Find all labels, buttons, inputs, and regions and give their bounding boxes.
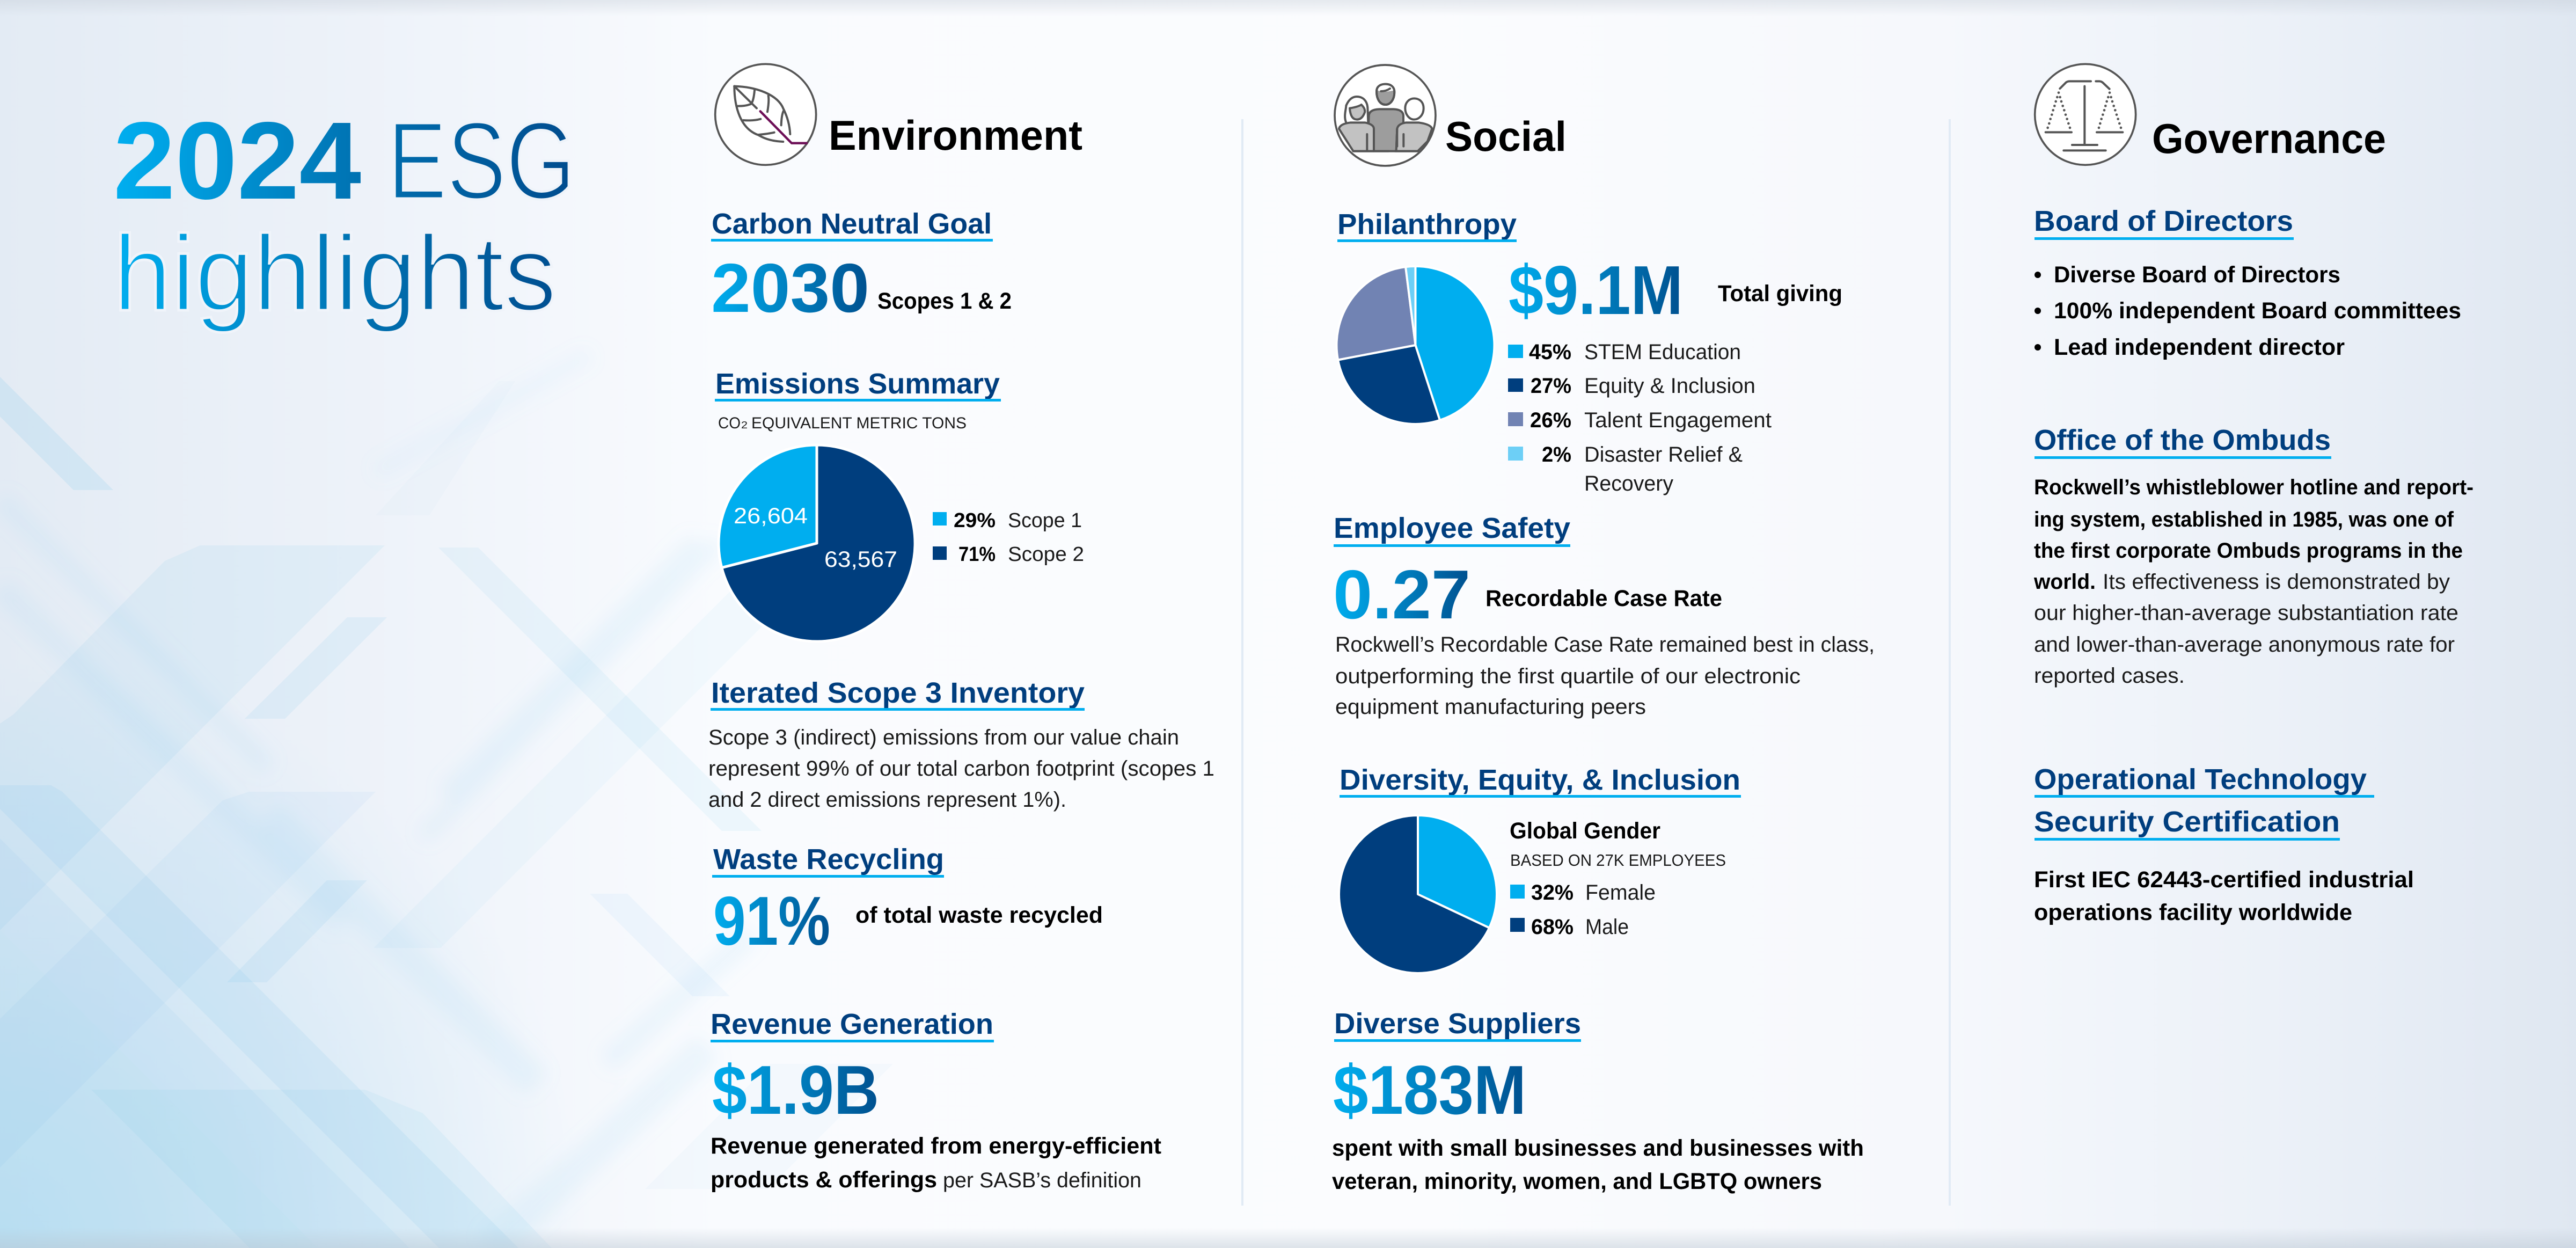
subheading: Revenue Generation: Revenue Generation bbox=[711, 1008, 993, 1040]
body text: operations facility worldwide bbox=[2034, 900, 2352, 925]
divider: social and governance bbox=[1949, 119, 1951, 1206]
block: waste recycling bbox=[712, 843, 1103, 960]
icon: scales bbox=[2035, 64, 2136, 165]
body text bbox=[708, 726, 1214, 812]
stat: 0.27: 0.27 bbox=[1333, 556, 1470, 633]
panel: environment bbox=[708, 64, 1214, 1193]
panel: social bbox=[1332, 65, 1875, 1194]
stat: $9.1M: $9.1M bbox=[1509, 252, 1683, 329]
body text: the first corporate Ombuds programs in the bbox=[2034, 539, 2463, 563]
pie chart: emissions: 63,567 bbox=[824, 546, 897, 572]
icon: leaf bbox=[715, 64, 816, 165]
legend: philanthropy: Equity & Inclusion bbox=[1584, 374, 1755, 398]
body text: per SASB’s definition bbox=[943, 1169, 1141, 1192]
body text bbox=[1335, 633, 1875, 719]
subheading: Philanthropy: Philanthropy bbox=[1337, 208, 1517, 240]
chart note: EQUIVALENT METRIC TONS bbox=[751, 414, 967, 432]
block: revenue generation bbox=[711, 1008, 1161, 1193]
body text: world. bbox=[2033, 570, 2096, 594]
block: philanthropy bbox=[1337, 208, 1842, 495]
stat: $1.9B: $1.9B bbox=[712, 1052, 879, 1129]
body text: outperforming the first quartile of our electronic bbox=[1335, 665, 1801, 688]
legend: gender bbox=[1510, 818, 1726, 939]
title: highlights bbox=[113, 214, 557, 333]
body text: Scope 3 (indirect) emissions from our value chain bbox=[708, 726, 1179, 749]
subheading: Operational Technology Security Certification: Security Certification bbox=[2034, 806, 2340, 838]
subheading: Board of Directors: Board of Directors bbox=[2034, 205, 2293, 237]
subheading: Carbon Neutral Goal: Carbon Neutral Goal bbox=[712, 208, 992, 240]
legend: gender: 32% bbox=[1531, 881, 1574, 904]
subheading: Emissions Summary: Emissions Summary bbox=[715, 368, 1000, 400]
body text: Rockwell’s whistleblower hotline and report- bbox=[2034, 476, 2473, 499]
pie chart: emissions bbox=[719, 445, 915, 641]
body text: and lower-than-average anonymous rate for bbox=[2034, 633, 2455, 656]
pie chart: gender bbox=[1339, 815, 1497, 973]
heading: Social: Social bbox=[1445, 113, 1567, 160]
body text bbox=[1332, 1135, 1864, 1194]
subheading: Iterated Scope 3 Inventory: Iterated Scope 3 Inventory bbox=[711, 677, 1085, 709]
legend: philanthropy: Disaster Relief & bbox=[1584, 443, 1743, 466]
legend: gender: Global Gender bbox=[1510, 818, 1660, 844]
legend: emissions: 71% bbox=[958, 543, 996, 566]
stat: 2030: 2030 bbox=[711, 250, 869, 327]
legend: philanthropy: 2% bbox=[1542, 443, 1571, 466]
body text bbox=[2034, 867, 2414, 925]
legend: philanthropy: 45% bbox=[1529, 340, 1571, 364]
bullet list: Lead independent director bbox=[2054, 334, 2345, 360]
block: board of directors bbox=[2034, 205, 2461, 360]
body text bbox=[2033, 476, 2473, 688]
body text: Rockwell’s Recordable Case Rate remained best in class, bbox=[1335, 633, 1875, 656]
legend: emissions: Scope 2 bbox=[1008, 543, 1084, 566]
legend: emissions bbox=[933, 509, 1084, 566]
legend: emissions: 29% bbox=[954, 509, 996, 532]
heading: Governance: Governance bbox=[2152, 115, 2386, 162]
legend: philanthropy: Recovery bbox=[1584, 472, 1673, 495]
subheading: Office of the Ombuds: Office of the Ombuds bbox=[2034, 424, 2331, 456]
subheading: Diversity, Equity, & Inclusion: Diversity, Equity, & Inclusion bbox=[1340, 764, 1740, 796]
stat label: Recordable Case Rate bbox=[1485, 586, 1722, 611]
block: diversity, equity, inclusion bbox=[1339, 764, 1741, 973]
icon: people bbox=[1335, 65, 1436, 166]
body text: First IEC 62443-certified industrial bbox=[2034, 867, 2414, 893]
pie chart: emissions: 26,604 bbox=[734, 503, 808, 528]
subheading: Employee Safety: Employee Safety bbox=[1334, 512, 1570, 544]
body text: Revenue generated from energy-efficient bbox=[711, 1133, 1161, 1159]
subheading: Waste Recycling: Waste Recycling bbox=[713, 843, 944, 875]
chart note: 2 bbox=[741, 420, 748, 430]
legend: gender: Male bbox=[1585, 915, 1629, 939]
legend: gender: 68% bbox=[1531, 915, 1574, 939]
body text: represent 99% of our total carbon footprint (scopes 1 bbox=[708, 757, 1214, 780]
bullet list bbox=[2035, 262, 2461, 360]
body text: ing system, established in 1985, was one of bbox=[2034, 508, 2454, 531]
body text: reported cases. bbox=[2034, 664, 2185, 688]
block: scope 3 inventory bbox=[708, 677, 1214, 812]
block: office of the ombuds bbox=[2033, 424, 2473, 688]
legend: philanthropy: Talent Engagement bbox=[1584, 408, 1772, 432]
legend: philanthropy: STEM Education bbox=[1584, 340, 1741, 364]
block: carbon neutral goal bbox=[711, 208, 1012, 327]
subheading: Operational Technology Security Certification bbox=[2034, 763, 2374, 841]
body text: equipment manufacturing peers bbox=[1335, 695, 1646, 719]
block: employee safety bbox=[1333, 512, 1875, 719]
pie chart: philanthropy bbox=[1337, 266, 1494, 424]
body text: products & offerings bbox=[711, 1167, 937, 1193]
title bbox=[113, 99, 575, 333]
stat: 91%: 91% bbox=[713, 882, 830, 960]
chart note: CO bbox=[718, 414, 741, 432]
stat label: Scopes 1 & 2 bbox=[877, 288, 1012, 314]
legend: emissions: Scope 1 bbox=[1008, 509, 1082, 532]
body text: our higher-than-average substantiation rate bbox=[2034, 601, 2458, 625]
legend: gender: Female bbox=[1585, 881, 1656, 904]
legend: philanthropy bbox=[1508, 340, 1772, 495]
title: 2024 bbox=[113, 99, 361, 222]
body text: Its effectiveness is demonstrated by bbox=[2103, 570, 2450, 594]
body text bbox=[711, 1133, 1161, 1193]
stat label: of total waste recycled bbox=[855, 902, 1103, 928]
body text: and 2 direct emissions represent 1%). bbox=[708, 788, 1066, 812]
block: emissions summary bbox=[715, 368, 1084, 641]
title: ESG bbox=[387, 99, 575, 222]
subheading: Operational Technology Security Certification: Operational Technology bbox=[2034, 763, 2367, 795]
block: operational technology bbox=[2034, 763, 2414, 925]
bullet list: Diverse Board of Directors bbox=[2054, 262, 2340, 288]
legend: gender: BASED ON 27K EMPLOYEES bbox=[1510, 851, 1726, 870]
body text: veteran, minority, women, and LGBTQ owners bbox=[1332, 1169, 1822, 1194]
stat label: Total giving bbox=[1718, 281, 1842, 306]
stat: $183M: $183M bbox=[1333, 1052, 1526, 1129]
block: diverse suppliers bbox=[1332, 1008, 1864, 1194]
body text: spent with small businesses and businesses with bbox=[1332, 1135, 1864, 1161]
panel: governance bbox=[2033, 64, 2473, 925]
subheading: Diverse Suppliers: Diverse Suppliers bbox=[1334, 1008, 1581, 1040]
divider: environment and social bbox=[1241, 119, 1243, 1206]
bullet list: 100% independent Board committees bbox=[2054, 298, 2461, 324]
legend: philanthropy: 27% bbox=[1531, 374, 1571, 398]
heading: Environment: Environment bbox=[829, 112, 1082, 159]
legend: philanthropy: 26% bbox=[1530, 408, 1571, 432]
